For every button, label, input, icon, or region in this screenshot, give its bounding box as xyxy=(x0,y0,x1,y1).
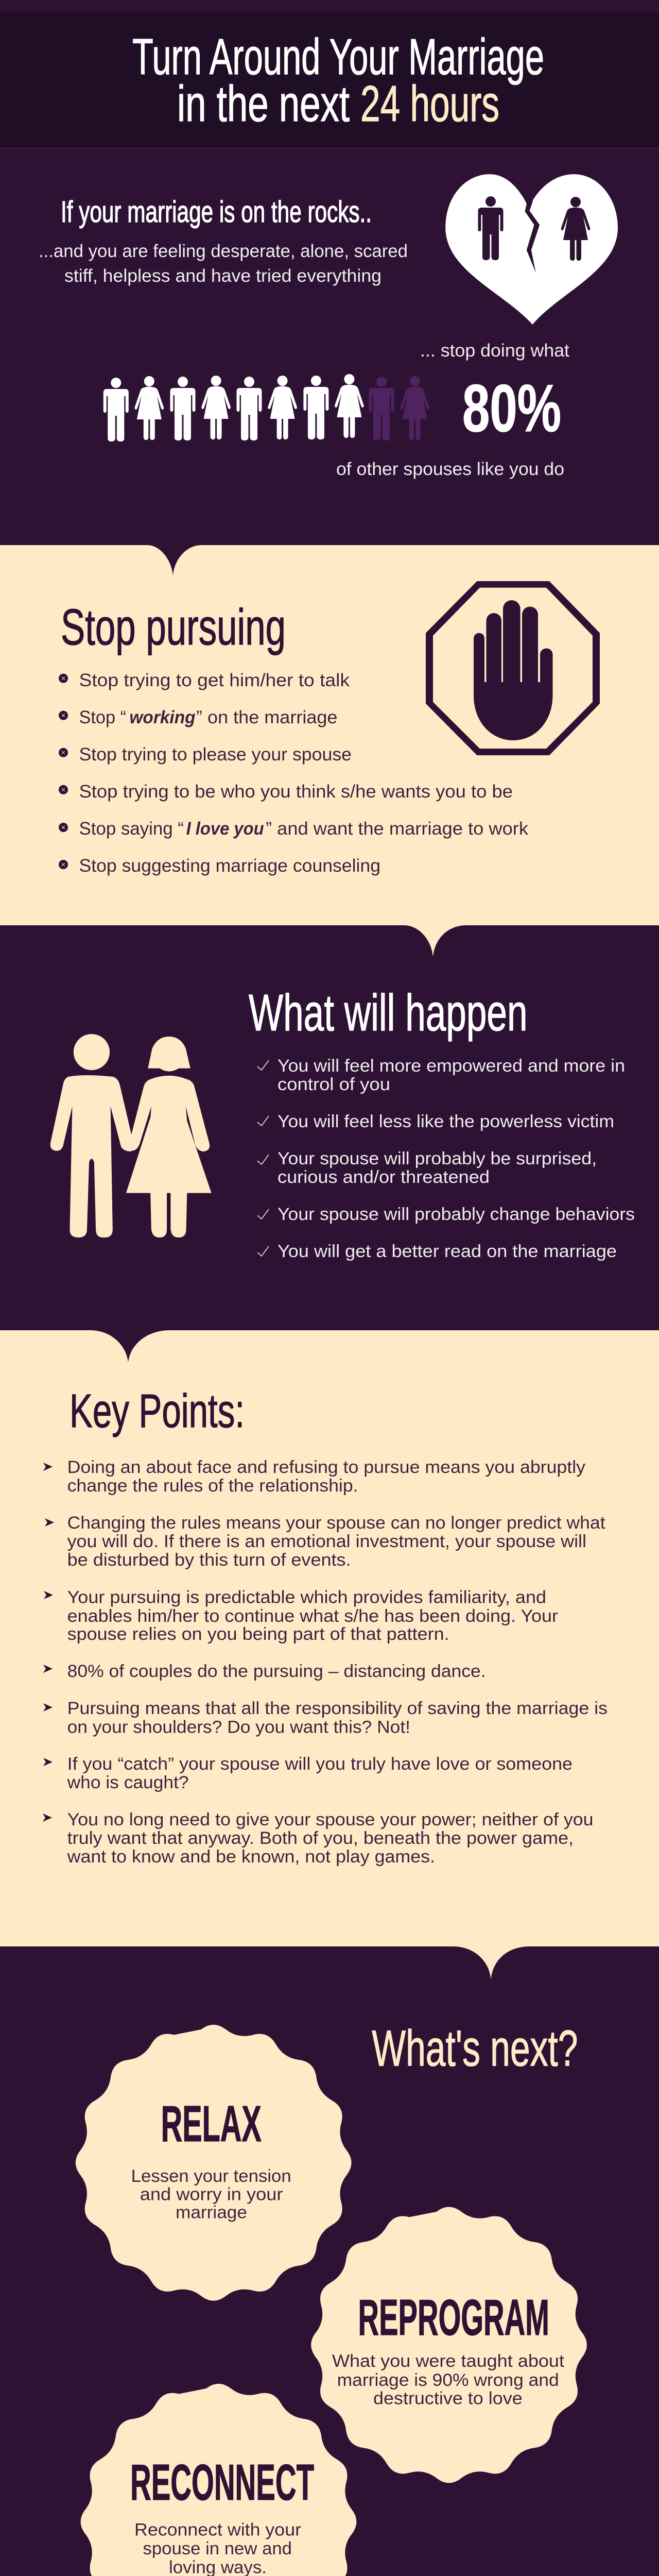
list item 1: Stop trying to get him/her to talk xyxy=(79,670,350,690)
list item 2 xyxy=(59,707,338,727)
badge text: relax: marriage xyxy=(176,2203,247,2223)
heading: key points: Key Points: xyxy=(70,1385,245,1437)
section tab xyxy=(404,925,466,957)
list item 6: Stop suggesting marriage counseling xyxy=(79,856,380,876)
key point 7 xyxy=(43,1810,594,1867)
key point 6: If you “catch” your spouse will you truly have love or someone xyxy=(67,1754,573,1774)
list item 5: ” and want the marriage to work xyxy=(266,819,529,839)
key point 1: change the rules of the relationship. xyxy=(67,1476,358,1496)
heading: stop pursuing: Stop pursuing xyxy=(61,599,286,655)
panel: what's next xyxy=(0,1946,659,2576)
key point 7: You no long need to give your spouse your power; neither of you xyxy=(67,1810,594,1829)
intro text xyxy=(39,241,408,286)
key point 1 xyxy=(43,1458,585,1496)
icon: broken heart with man and woman xyxy=(445,174,618,325)
check item 5: You will get a better read on the marriage xyxy=(278,1242,617,1261)
check item 1: You will feel more empowered and more in xyxy=(278,1056,625,1076)
statistic: 80%: 80% xyxy=(462,370,561,446)
key point 2 xyxy=(45,1513,605,1570)
panel: key points xyxy=(0,1330,659,1946)
panel: stop pursuing xyxy=(0,545,659,925)
key point 3 xyxy=(44,1588,558,1644)
key point 7: truly want that anyway. Both of you, beneath the power game, xyxy=(67,1828,574,1848)
text: of other spouses: of other spouses like you do xyxy=(336,459,564,479)
badge: reprogram xyxy=(311,2207,587,2483)
check item 3: Your spouse will probably be surprised, xyxy=(278,1149,597,1168)
text: stop doing what: ... stop doing what xyxy=(420,341,569,361)
panel: what will happen xyxy=(0,925,659,1330)
key point 6: who is caught? xyxy=(67,1773,189,1792)
key point 2: Changing the rules means your spouse can no longer predict what xyxy=(67,1513,605,1533)
key point 5 xyxy=(43,1699,608,1737)
key point 3: Your pursuing is predictable which provides familiarity, and xyxy=(67,1588,546,1607)
badge text: relax: and worry in your xyxy=(140,2185,283,2205)
intro heading: If your marriage is on the rocks.. xyxy=(61,195,372,229)
key point 6 xyxy=(43,1754,573,1792)
badge text: reconnect: Reconnect with your xyxy=(134,2520,301,2540)
key point 5: Pursuing means that all the responsibility of saving the marriage is xyxy=(67,1699,608,1718)
section tab xyxy=(90,1330,170,1362)
badge text: relax: Lessen your tension xyxy=(131,2166,291,2186)
badge title: relax: RELAX xyxy=(161,2095,262,2152)
section tab xyxy=(147,545,202,575)
key point 1: Doing an about face and refusing to pursue means you abruptly xyxy=(67,1458,585,1477)
badge: relax xyxy=(76,2025,352,2301)
badge text: reprogram: marriage is 90% wrong and xyxy=(337,2370,559,2390)
check item 4: Your spouse will probably change behaviors xyxy=(278,1205,635,1224)
key point 3: enables him/her to continue what s/he has been doing. Your xyxy=(67,1606,558,1626)
badge text: reprogram: What you were taught about xyxy=(332,2351,565,2371)
intro text: stiff, helpless and have tried everything xyxy=(64,266,381,286)
key point 4: 80% of couples do the pursuing – distancing dance. xyxy=(67,1662,486,1681)
icon: stop sign with hand xyxy=(426,581,600,755)
check item 1 xyxy=(257,1056,625,1094)
check item 3 xyxy=(257,1149,597,1187)
list item 4: Stop trying to be who you think s/he wants you to be xyxy=(79,782,513,802)
intro text: ...and you are feeling desperate, alone, scared xyxy=(39,241,408,261)
heading: what's next: What's next? xyxy=(372,2020,578,2076)
list item 5 xyxy=(59,819,529,839)
list: stop items xyxy=(59,670,529,876)
panel: title banner xyxy=(0,12,659,148)
list item 3: Stop trying to please your spouse xyxy=(79,744,352,765)
panel: intro xyxy=(39,174,618,479)
check item 3: curious and/or threatened xyxy=(278,1167,490,1187)
badge text: reprogram: destructive to love xyxy=(373,2389,523,2409)
key point 2: be disturbed by this turn of events. xyxy=(67,1550,351,1570)
checklist xyxy=(257,1056,635,1261)
panel: page background top strip xyxy=(0,0,659,545)
list item 2: Stop “ xyxy=(79,707,126,727)
key point 2: you will do. If there is an emotional investment, your spouse will xyxy=(67,1532,586,1551)
badge text: reprogram xyxy=(332,2351,565,2409)
list item 2: ” on the marriage xyxy=(196,707,338,727)
title line two: in the next xyxy=(177,75,350,132)
section tab xyxy=(453,1946,530,1979)
list item 2: working xyxy=(129,707,196,727)
icon row: eight of ten people highlighted xyxy=(103,374,429,442)
heading: what will happen: What will happen xyxy=(249,984,527,1042)
check item 2: You will feel less like the powerless victim xyxy=(278,1112,614,1131)
list item 5: Stop saying “ xyxy=(79,819,184,839)
title highlight: 24 hours: 24 hours xyxy=(360,75,499,132)
key point 3: spouse relies on you being part of that pattern. xyxy=(67,1624,449,1644)
badge text: reconnect xyxy=(134,2520,301,2576)
badge text: relax xyxy=(131,2166,291,2223)
badge text: reconnect: spouse in new and xyxy=(143,2539,292,2558)
badge: reconnect xyxy=(81,2384,356,2576)
list item 5: I love you xyxy=(186,819,264,839)
key point 5: on your shoulders? Do you want this? Not! xyxy=(67,1718,410,1737)
icon: couple holding hands xyxy=(50,1034,212,1238)
check item 1: control of you xyxy=(278,1075,390,1094)
badge title: reconnect: RECONNECT xyxy=(130,2454,314,2511)
key point 7: want to know and be known, not play games. xyxy=(67,1847,435,1867)
